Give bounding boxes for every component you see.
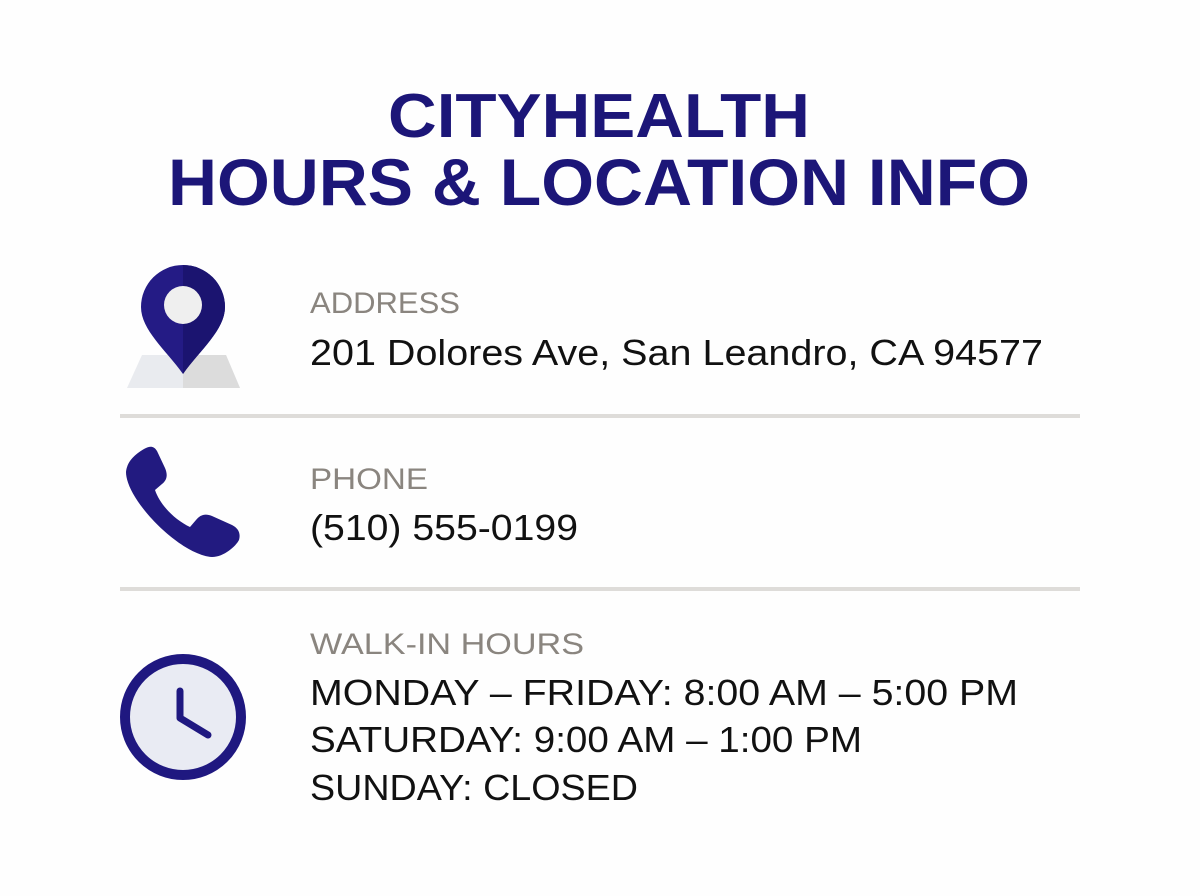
title: CITYHEALTH <box>388 82 810 151</box>
section: phone: PHONE <box>310 463 428 496</box>
title: HOURS & LOCATION INFO <box>168 145 1030 219</box>
section: address: ADDRESS <box>310 287 460 320</box>
section: walk-in hours: SUNDAY: CLOSED <box>310 767 638 808</box>
icon: location pin <box>127 265 240 388</box>
section: walk-in hours: SATURDAY: 9:00 AM – 1:00 PM <box>310 719 862 760</box>
icon: phone <box>126 447 240 557</box>
section: walk-in hours: WALK-IN HOURS <box>310 628 584 661</box>
section: address: 201 Dolores Ave, San Leandro, CA 94577 <box>310 332 1043 373</box>
section: phone <box>310 463 578 548</box>
section: walk-in hours: MONDAY – FRIDAY: 8:00 AM – 5:00 PM <box>310 672 1018 713</box>
icon: clock <box>125 659 241 775</box>
section: phone: (510) 555-0199 <box>310 507 578 548</box>
title <box>168 82 1030 219</box>
section: address <box>310 287 1043 373</box>
section: walk-in hours <box>310 628 1018 808</box>
